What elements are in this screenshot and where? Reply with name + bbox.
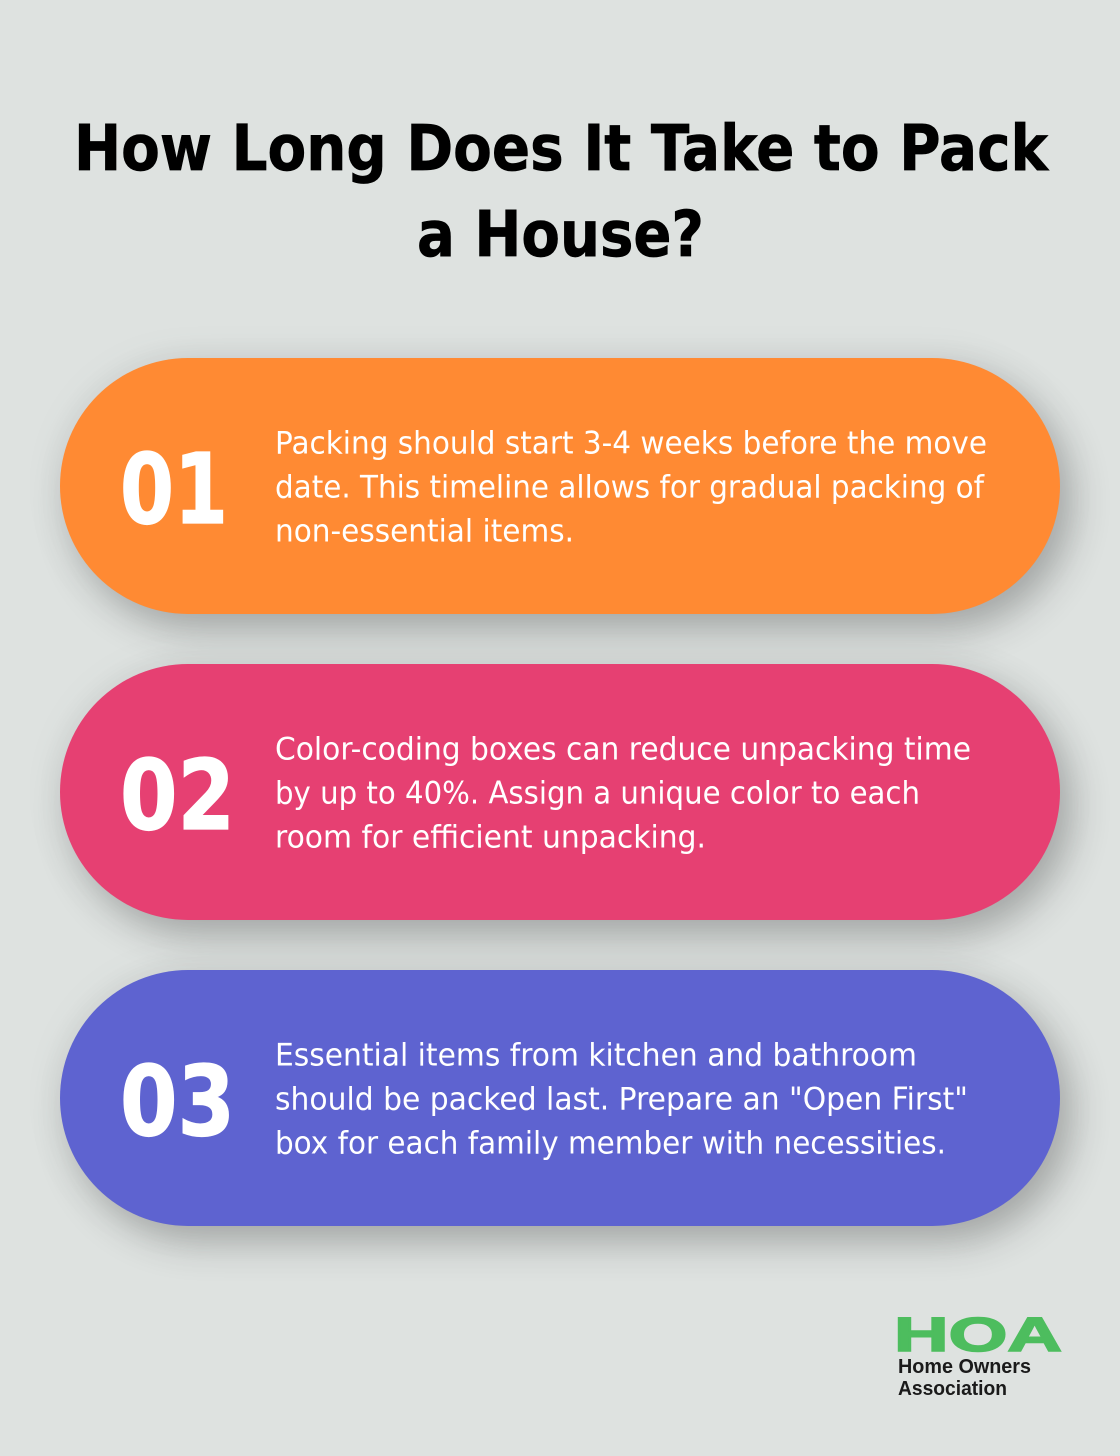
number 02: 02: [120, 739, 235, 852]
logo: HOA Home Owners Association: [894, 1310, 1062, 1400]
logo: HOA Home Owners Association: Home Owners: [898, 1356, 1031, 1378]
title: a House?: [417, 198, 704, 271]
text: step 01 description: [275, 426, 987, 550]
text: step 03 description: box for each family member with necessities.: [275, 1126, 946, 1162]
text: step 02 description: Color-coding boxes can reduce unpacking time: [275, 732, 971, 768]
text: step 02 description: [275, 732, 971, 856]
text: step 03 description: should be packed last. Prepare an "Open First": [275, 1082, 968, 1118]
number 03: 03: [120, 1045, 235, 1158]
logo: HOA Home Owners Association: HOA: [894, 1310, 1062, 1362]
text: step 01 description: date. This timeline allows for gradual packing of: [275, 470, 985, 506]
number 01: 01: [120, 433, 228, 546]
text: step 01 description: non-essential items.: [275, 514, 574, 550]
title: [74, 112, 1050, 271]
text: step 02 description: by up to 40%. Assign a unique color to each: [275, 776, 920, 812]
panel: step 01: [60, 358, 1060, 614]
panel: step 03: [60, 970, 1060, 1226]
panel: step 02: [60, 664, 1060, 920]
logo: HOA Home Owners Association: Association: [898, 1378, 1007, 1400]
text: step 03 description: [275, 1038, 968, 1162]
text: step 02 description: room for efficient unpacking.: [275, 820, 706, 856]
text: step 01 description: Packing should start 3-4 weeks before the move: [275, 426, 987, 462]
text: step 03 description: Essential items from kitchen and bathroom: [275, 1038, 917, 1074]
